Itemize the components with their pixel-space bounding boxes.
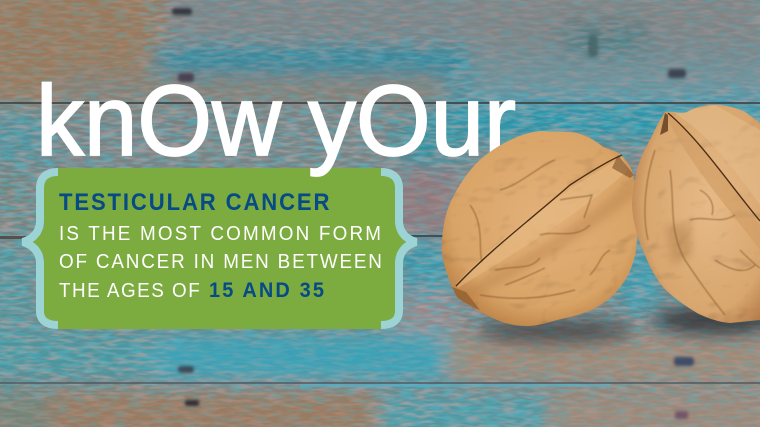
walnut: right	[628, 100, 760, 328]
text block: callout statement: OF CANCER IN MEN BETWEEN	[59, 250, 382, 273]
walnut: left	[442, 131, 638, 326]
text block: callout statement	[59, 222, 382, 302]
crease	[668, 113, 760, 221]
text block: callout statement: IS THE MOST COMMON FORM	[59, 222, 381, 245]
panel background	[30, 168, 410, 329]
text block: callout statement: THE AGES OF	[59, 279, 200, 302]
heading: testicular cancer: TESTICULAR CANCER	[59, 188, 330, 215]
title: knOw yOur	[36, 65, 516, 177]
crease	[456, 155, 622, 286]
right bracket	[381, 172, 416, 325]
highlighted ages: 15 AND 35	[209, 279, 324, 302]
walnut shadows	[477, 306, 760, 343]
left bracket	[23, 172, 58, 325]
panel: green callout with brackets	[30, 168, 410, 329]
